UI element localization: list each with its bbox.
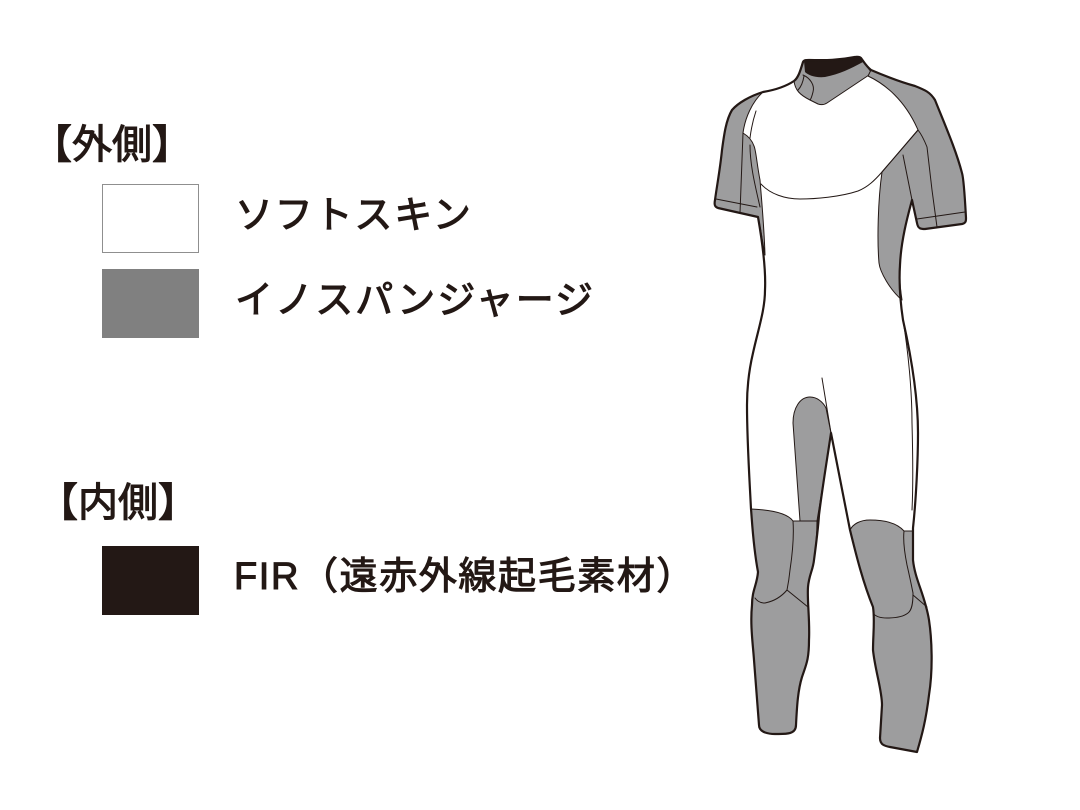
label: FIR: FIR（遠赤外線起毛素材） — [234, 556, 696, 598]
swatch: soft skin — [102, 184, 198, 252]
heading: outside: 【外側】 — [32, 123, 192, 167]
right sleeve and side panel — [868, 70, 966, 300]
crotch gusset — [793, 397, 831, 521]
collar — [794, 58, 872, 105]
seams — [716, 75, 965, 618]
right lower leg panel — [850, 520, 932, 752]
heading: inside: 【内側】 — [38, 481, 198, 525]
swatch: FIR — [102, 546, 199, 615]
suit body silhouette — [715, 57, 966, 752]
swatch: inos sponge jersey — [102, 269, 199, 338]
label: inos sponge jersey: イノスパンジャージ — [235, 280, 595, 322]
suit outer outline — [715, 57, 966, 752]
FIR collar lining — [804, 57, 863, 77]
wetsuit illustration — [715, 57, 966, 752]
left lower leg panel — [751, 509, 817, 734]
label: soft skin: ソフトスキン — [235, 195, 473, 237]
left sleeve panel — [715, 92, 765, 255]
